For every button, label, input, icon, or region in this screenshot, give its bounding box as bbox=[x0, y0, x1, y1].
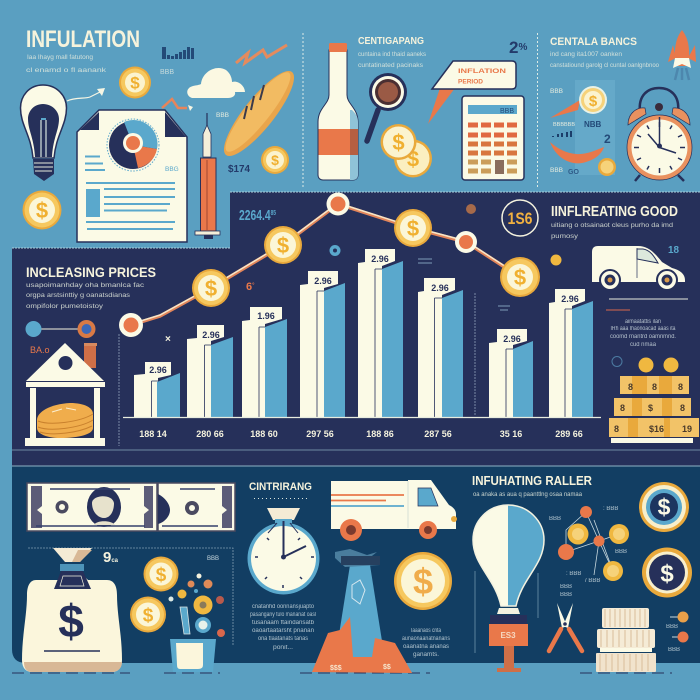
chart: mini dashboard: BBB bbox=[550, 167, 563, 174]
text block: Iaaanaos crita bbox=[411, 628, 442, 634]
text block: uitiang o otsainaot cleus purho da imd bbox=[551, 222, 674, 229]
icon: syringe bbox=[195, 113, 220, 239]
icon: delivery truck bbox=[331, 480, 457, 541]
icon: large coin bbox=[394, 552, 452, 610]
label: BBB bbox=[216, 112, 229, 119]
icon: report document: BBG bbox=[165, 166, 179, 173]
diagram: coin network: BBB bbox=[560, 584, 572, 590]
icon: coin blue: $ bbox=[658, 494, 671, 520]
diagram: coin network: / BBB bbox=[585, 578, 600, 584]
panel: central banks bbox=[550, 30, 696, 181]
axis labels: 297 56 bbox=[306, 429, 334, 439]
bar: 2: 2.96 bbox=[202, 330, 220, 340]
icon: coin bbox=[261, 146, 289, 174]
text block: van note: coomd rnantrd oamnmnd. bbox=[610, 334, 676, 340]
callout: inflation period bbox=[428, 61, 516, 124]
icon: coin navy bbox=[642, 548, 692, 598]
text block: oaanatna ananas bbox=[403, 644, 449, 650]
text block: cuntaina ind thaid aaneks bbox=[358, 51, 426, 58]
text block: inflation description: Iaa Ihayg mall fatutong bbox=[27, 54, 94, 61]
icon: rocket bbox=[668, 30, 696, 80]
icon: large lightbulb: ES3 bbox=[500, 631, 516, 640]
arrow: range bbox=[609, 298, 688, 300]
heading: inflating raller: INFUHATING RALLER bbox=[472, 474, 592, 488]
heading: CENTIGAPANG bbox=[358, 36, 424, 47]
label: two percent: % bbox=[518, 42, 527, 53]
badge: 156: 1S6 bbox=[508, 209, 532, 228]
icon: scissors bbox=[549, 603, 582, 651]
label: headline figure: 85 bbox=[271, 210, 276, 217]
bar: 1: 2.96 bbox=[149, 365, 167, 375]
icon: spotlight tower: $$ bbox=[383, 664, 391, 671]
icon: coin bbox=[119, 66, 151, 98]
text block bbox=[358, 51, 426, 69]
bar: 7: 2.96 bbox=[503, 334, 521, 344]
text block: inflation description bbox=[26, 54, 107, 74]
icon: gold bricks: 8 bbox=[628, 382, 633, 392]
label: headline figure: 2264.4 bbox=[239, 207, 285, 224]
icon: large lightbulb bbox=[473, 505, 544, 672]
text block bbox=[551, 222, 674, 240]
chart: mini dashboard: NBB bbox=[584, 120, 602, 129]
icon: gold bricks: 8 bbox=[680, 403, 685, 413]
icon: coin stack: $ bbox=[392, 130, 405, 155]
panel: centripetal pricing bbox=[318, 36, 527, 180]
icon: calculator bbox=[462, 96, 524, 180]
diagram: coin network: : BBB bbox=[566, 571, 581, 577]
bar: 4 bbox=[300, 271, 345, 417]
coin: $ bbox=[514, 265, 526, 290]
icon: coin blue bbox=[639, 482, 689, 532]
heading: inflation: INFULATION bbox=[26, 26, 140, 53]
bar: 3 bbox=[242, 307, 287, 417]
bar: 2 bbox=[187, 325, 233, 417]
chart: mini dashboard: BBB bbox=[550, 88, 563, 95]
icon: alarm clock bbox=[627, 88, 692, 181]
icon: cup with scattered dots bbox=[168, 574, 225, 672]
icon: bank with bread bbox=[25, 343, 105, 446]
icon: coin: $ bbox=[156, 565, 167, 586]
icon: cloud bbox=[187, 68, 245, 98]
icon: gold bricks: $ bbox=[648, 403, 653, 413]
markers bbox=[165, 204, 562, 345]
arrow: bulb trend bbox=[67, 88, 105, 101]
text block: van note bbox=[610, 319, 676, 348]
label: price: $174 bbox=[228, 164, 250, 175]
icon: large coin: $ bbox=[413, 561, 433, 602]
bar: 1 bbox=[134, 362, 180, 417]
label: 18 bbox=[668, 245, 679, 256]
icon: calculator: BBB bbox=[500, 108, 514, 115]
text block: controlling note: ona tlaatanats tanas bbox=[258, 636, 308, 642]
icon: dollar bills bbox=[27, 483, 235, 531]
chart: pie bbox=[107, 119, 159, 171]
panel: controlling money bbox=[12, 474, 692, 673]
icon: mini bars bbox=[162, 47, 194, 59]
coin bbox=[264, 226, 302, 264]
axis labels: 287 56 bbox=[424, 429, 452, 439]
callout: inflation period: PERIOD bbox=[458, 78, 483, 86]
badge: 156 bbox=[502, 200, 538, 236]
text block: usapoimanhday oha bmanlca fac bbox=[26, 282, 144, 289]
text block: aunaonaanatnanans bbox=[402, 636, 450, 642]
icon: stopwatch bbox=[248, 508, 320, 594]
icon: coin: $ bbox=[143, 606, 154, 626]
arrow: orange wiggle bbox=[162, 99, 193, 111]
icon: money sack bbox=[22, 548, 122, 672]
axis labels: 289 66 bbox=[555, 429, 583, 439]
bar: 6: 2.96 bbox=[431, 283, 449, 293]
diagram: coin network: BBB bbox=[560, 592, 572, 598]
label: 9ca bbox=[103, 549, 119, 566]
heading: increasing prices: INCLEASING PRICES bbox=[26, 264, 156, 280]
icon: gold bricks: $16 bbox=[649, 424, 664, 434]
icon: coin: $ bbox=[130, 74, 140, 92]
arrow: red range bbox=[606, 309, 630, 311]
panel: increasing prices chart bbox=[12, 192, 700, 466]
axis labels bbox=[139, 429, 583, 439]
label: BBB bbox=[160, 69, 174, 76]
chart: trend line with coins bbox=[119, 192, 540, 337]
diagram: coin network: BBB bbox=[549, 516, 561, 522]
icon: small connectors: BBB bbox=[666, 624, 678, 630]
text block: controlling note: pasangany tulo mananat oasl bbox=[250, 612, 316, 618]
text block: orgpa arstsinttiy g oanatsdianas bbox=[26, 292, 130, 299]
node bbox=[326, 192, 350, 216]
text block: ganamts. bbox=[413, 652, 439, 658]
text block: van note: IRh aaa Ihaonoacad aaas ita bbox=[610, 326, 676, 332]
axis labels: 188 60 bbox=[250, 429, 278, 439]
icon: node link bbox=[26, 320, 96, 338]
icon: small connectors bbox=[666, 612, 688, 653]
coin: $ bbox=[205, 276, 217, 301]
axis labels: 35 16 bbox=[500, 429, 522, 439]
markers: 6 bbox=[246, 281, 252, 293]
icon: gold bricks: 8 bbox=[620, 403, 625, 413]
icon: coin stack: $ bbox=[407, 146, 419, 172]
text block: cuntatinated pacinaks bbox=[358, 62, 423, 69]
bar: 7 bbox=[489, 329, 533, 417]
text block: oa anaka as aua q paanttlng osaa namaa bbox=[473, 491, 582, 498]
text block: inflation description: cl enamd o fl aanank bbox=[26, 67, 107, 74]
icon: report document bbox=[77, 110, 187, 242]
chart: mini dashboard: 2 bbox=[604, 132, 611, 146]
icon: coin navy: $ bbox=[660, 560, 674, 588]
bar: 5 bbox=[358, 249, 403, 417]
axis labels: 188 86 bbox=[366, 429, 394, 439]
chart: mini dashboard: $ bbox=[589, 93, 598, 110]
text block: controlling note: ponit... bbox=[273, 645, 293, 651]
text block: canstatiound garolg cl cuntal oanlgnbnoo bbox=[550, 62, 659, 69]
text block: controlling note: cnatanhd oonnansjuapto bbox=[252, 604, 315, 610]
icon: bottle bbox=[318, 43, 358, 180]
icon: coin: $ bbox=[271, 152, 279, 168]
icon: gold bricks: 8 bbox=[678, 382, 683, 392]
bar: 3: 1.96 bbox=[257, 311, 275, 321]
icon: gold bricks bbox=[609, 356, 699, 443]
icon: gold bricks: 8 bbox=[652, 382, 657, 392]
text block: van note: aimaatattis ilan bbox=[625, 319, 661, 325]
text block: controlling note: oaoartaatarsht pnanan bbox=[252, 628, 314, 634]
coin bbox=[192, 269, 230, 307]
icon: coin bbox=[144, 556, 178, 592]
node bbox=[119, 313, 143, 337]
icon: paper stack bbox=[596, 608, 656, 672]
chart: mini dashboard: GO bbox=[568, 169, 579, 176]
diagram: coin network: : BBB bbox=[603, 506, 618, 512]
icon: money sack: $ bbox=[58, 595, 84, 647]
chart: mini dashboard bbox=[550, 80, 616, 176]
callout: inflation period: INFLATION bbox=[458, 68, 506, 75]
coin bbox=[394, 209, 432, 247]
text block bbox=[550, 51, 659, 69]
node bbox=[455, 231, 477, 253]
icon: coin stack bbox=[380, 124, 432, 178]
text block bbox=[26, 282, 144, 310]
icon: coin bbox=[22, 190, 62, 230]
markers: × bbox=[165, 334, 171, 345]
chart: mini dashboard: BBBBBB bbox=[553, 122, 575, 128]
icon: spotlight tower bbox=[312, 549, 412, 673]
coin bbox=[500, 257, 540, 297]
coin: $ bbox=[277, 233, 289, 258]
bar: 4: 2.96 bbox=[314, 276, 332, 286]
text block: ind cang ita1007 oanken bbox=[550, 51, 623, 58]
icon: coin: $ bbox=[36, 198, 48, 223]
bar: 8: 2.96 bbox=[561, 294, 579, 304]
ground line bbox=[12, 672, 672, 674]
axis labels: 280 66 bbox=[196, 429, 224, 439]
text block: pumosy bbox=[551, 233, 579, 240]
arrow: rising zigzag bbox=[236, 45, 287, 63]
heading: CENTALA BANCS bbox=[550, 36, 637, 48]
text block: controlling note bbox=[250, 604, 316, 651]
icon: spotlight tower: $$$ bbox=[330, 665, 342, 672]
text block: controlling note: tusanaam ftaindansatb bbox=[252, 620, 315, 626]
diagram: coin network: BBB bbox=[615, 549, 627, 555]
diagram: coin network bbox=[549, 506, 629, 598]
text block: van note: cud nmaa bbox=[630, 342, 657, 348]
bar: 8 bbox=[549, 289, 593, 417]
chart: price bars bbox=[123, 249, 601, 439]
label: BBB bbox=[207, 556, 219, 562]
icon: coin bbox=[130, 596, 166, 632]
icon: magnifier bbox=[367, 73, 407, 141]
panel: inflation overview bbox=[20, 26, 304, 242]
axis labels: 188 14 bbox=[139, 429, 167, 439]
text block: ompifolor pumetoistoy bbox=[26, 303, 104, 310]
bar: 5: 2.96 bbox=[371, 254, 389, 264]
text block bbox=[402, 628, 450, 658]
heading: CINTRIRANG bbox=[249, 481, 312, 493]
icon: bread loaf bbox=[214, 63, 304, 164]
label: two percent: 2 bbox=[509, 38, 518, 57]
icon: gold bricks: 8 bbox=[614, 424, 619, 434]
icon: gold bricks: 19 bbox=[682, 424, 692, 434]
coin: $ bbox=[407, 216, 419, 241]
markers: ° bbox=[252, 283, 255, 289]
icon: small connectors: BBB bbox=[668, 647, 680, 653]
bar: 6 bbox=[418, 278, 463, 417]
label: BA.o bbox=[30, 345, 50, 355]
panel: lower band bbox=[12, 466, 700, 663]
icon: lightbulb bbox=[20, 85, 66, 181]
icon: delivery van bbox=[592, 246, 685, 290]
